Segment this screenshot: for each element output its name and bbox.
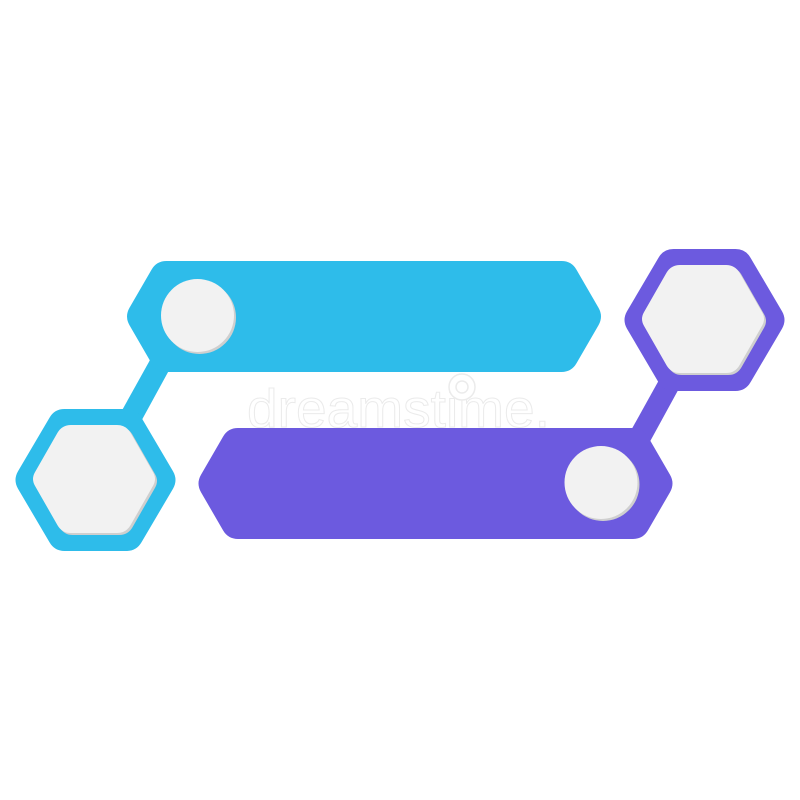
purple hexagon frame (624, 249, 784, 391)
purple banner (198, 428, 672, 539)
blue hexagon frame (16, 409, 176, 551)
purple group (198, 249, 784, 539)
blue group (16, 261, 601, 551)
purple banner circle (564, 446, 640, 521)
blue connector (120, 351, 173, 427)
blue hexagon inner (33, 425, 157, 535)
blue banner (127, 261, 601, 372)
purple hexagon inner (642, 265, 766, 375)
blue banner circle (161, 279, 236, 354)
watermark: dreamstime. (247, 379, 550, 439)
purple connector (629, 371, 682, 447)
